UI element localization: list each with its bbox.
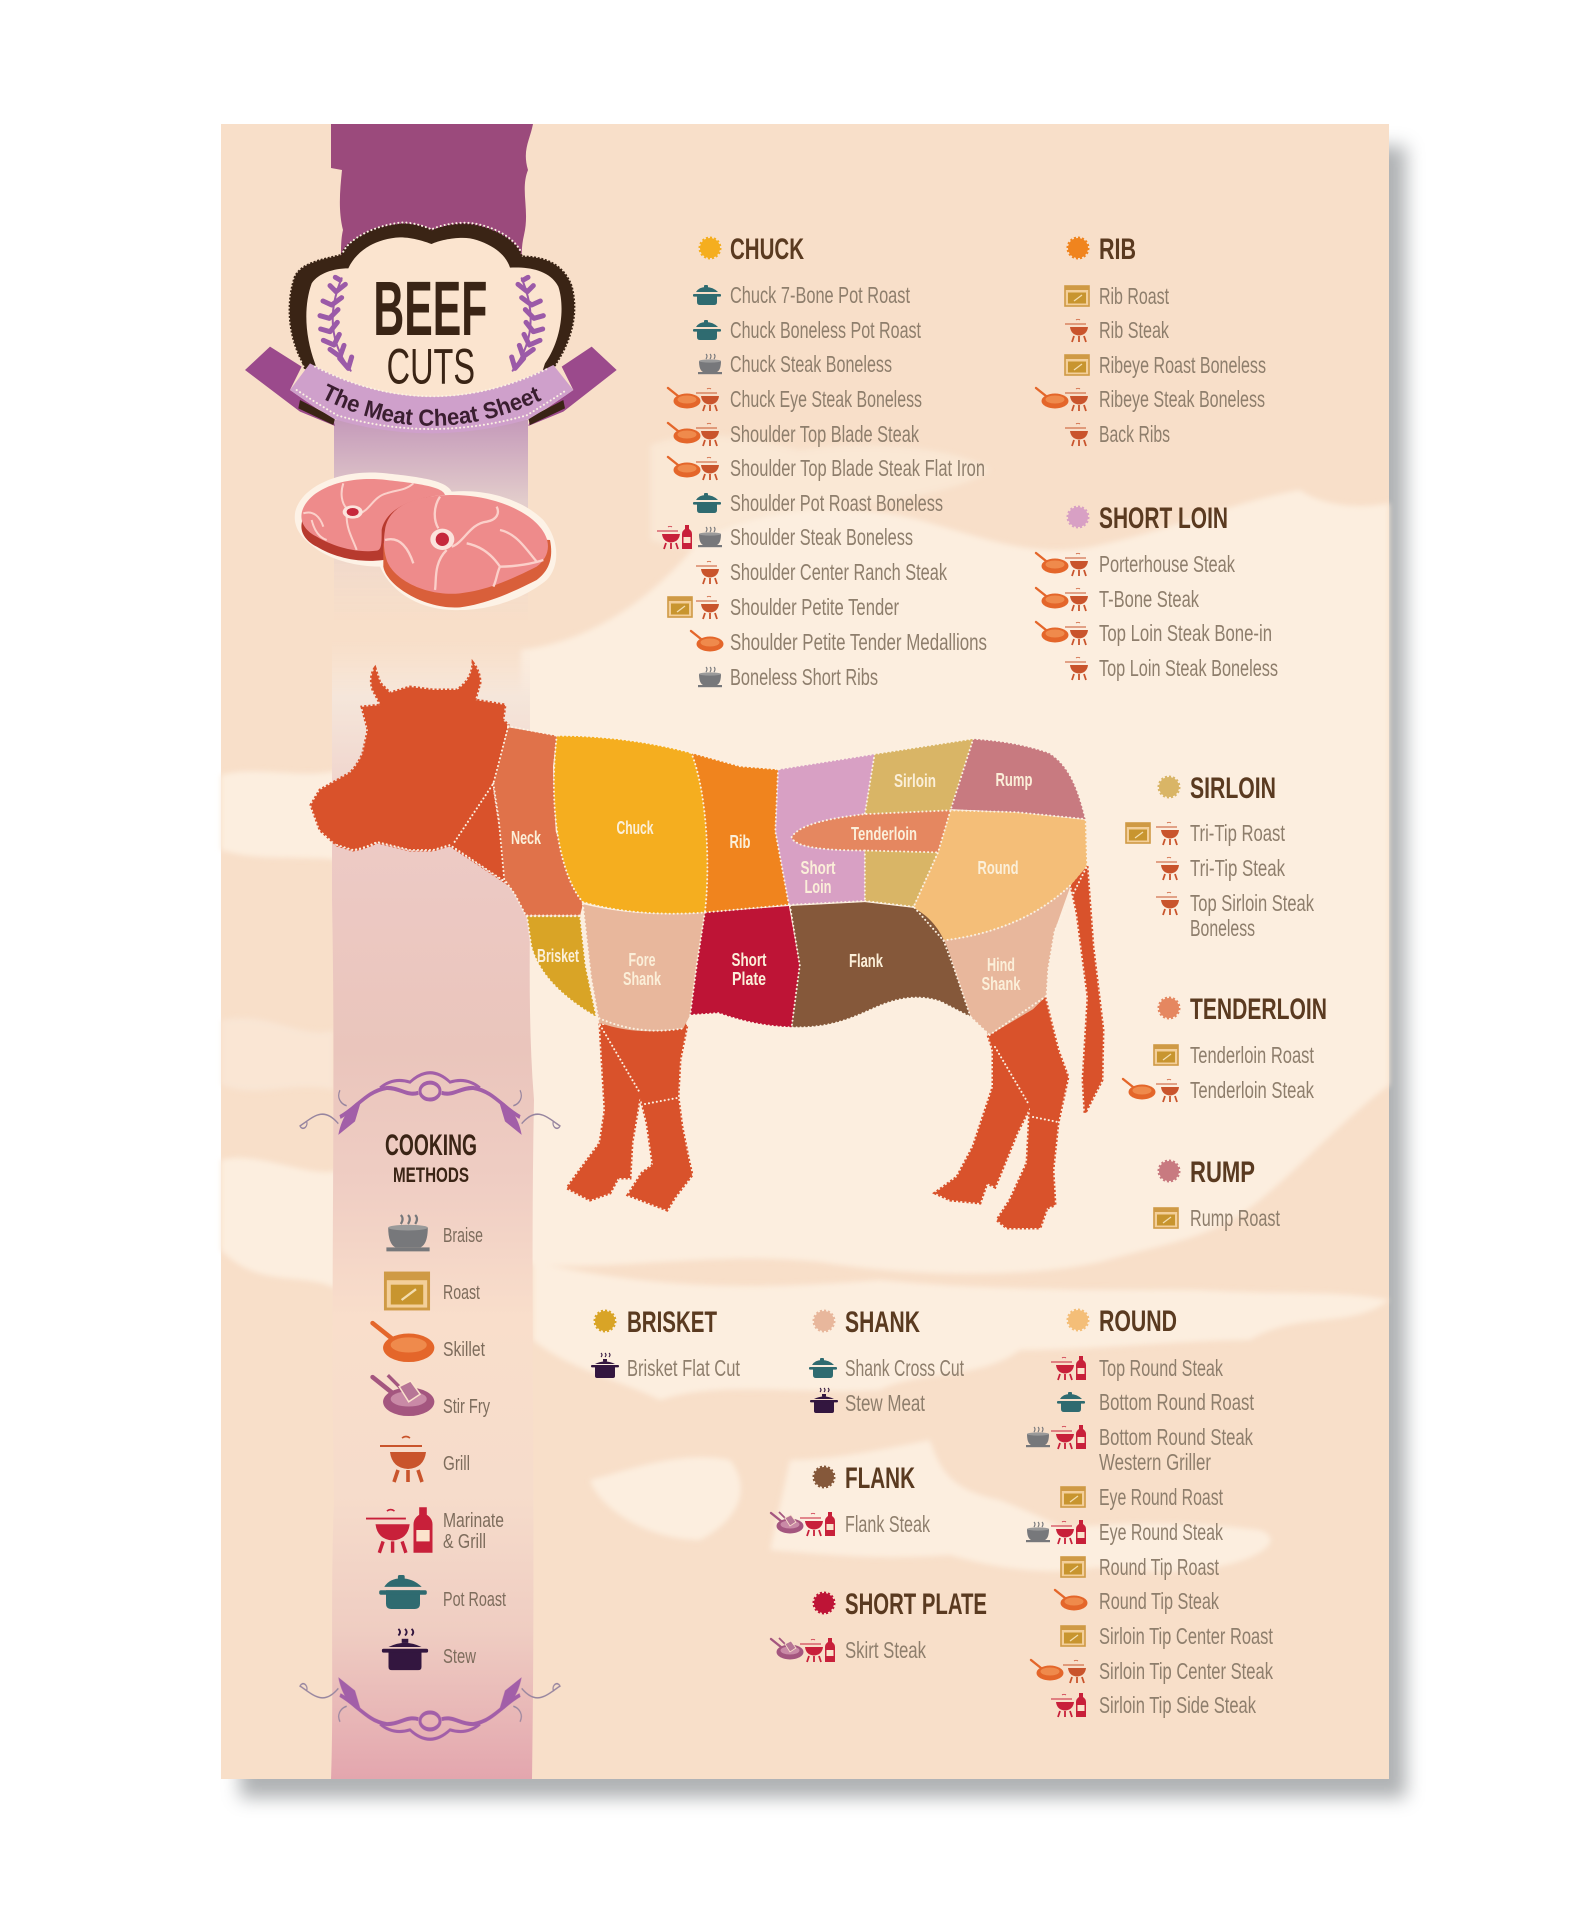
row: Shoulder Steak Boneless [657, 524, 913, 550]
row: Shoulder Petite Tender [668, 594, 899, 620]
row: Round Tip Steak [1055, 1588, 1219, 1614]
short loin [775, 754, 875, 905]
rump [951, 739, 1086, 819]
heading: flank: FLANK [845, 1462, 915, 1495]
cut labels: Plate [732, 969, 766, 989]
row: Flank Steak [771, 1511, 930, 1537]
panel: flank cuts [771, 1462, 930, 1537]
top purple ribbon strip [331, 124, 533, 310]
cut labels: Shank [982, 974, 1021, 994]
row: Top Loin Steak Boneless: Top Loin Steak Boneless [1099, 655, 1278, 681]
row: Shoulder Center Ranch Steak: Shoulder Center Ranch Steak [730, 559, 947, 585]
legend: roast [385, 1273, 480, 1309]
row: Top Loin Steak Bone-in [1036, 620, 1272, 646]
title: CUTS: CUTS [387, 338, 475, 394]
row: Rib Steak: Rib Steak [1099, 317, 1169, 343]
row: Bottom Round Roast [1057, 1389, 1254, 1415]
row: Shank Cross Cut: Shank Cross Cut [845, 1355, 964, 1381]
panel: brisket cuts [591, 1306, 740, 1381]
cut labels: Shank [623, 969, 662, 989]
legend: grill [380, 1436, 470, 1482]
row: Tenderloin Roast: Tenderloin Roast [1190, 1042, 1314, 1068]
cut labels: Sirloin [894, 771, 936, 791]
cut labels: Chuck [616, 818, 654, 838]
title badge [245, 222, 616, 434]
row: Top Sirloin Steak Boneless: Boneless [1190, 915, 1255, 941]
badge frame [290, 224, 574, 393]
row: Chuck Steak Boneless: Chuck Steak Boneless [730, 351, 892, 377]
tenderloin [792, 810, 951, 852]
row: Shoulder Top Blade Steak Flat Iron [668, 455, 985, 481]
row: Stew Meat: Stew Meat [845, 1390, 925, 1416]
row: Chuck 7-Bone Pot Roast [693, 282, 910, 308]
row: Shoulder Petite Tender: Shoulder Petite Tender [730, 594, 899, 620]
badge interior [306, 237, 562, 400]
heading: sirloin: SIRLOIN [1190, 772, 1276, 805]
row: Flank Steak: Flank Steak [845, 1511, 930, 1537]
row: Bottom Round Steak Western Griller: Bottom Round Steak [1099, 1424, 1253, 1450]
heading: sirloin [1159, 772, 1276, 805]
row: Shoulder Pot Roast Boneless [693, 490, 943, 516]
ribbon tails [245, 347, 617, 426]
legend: braise: Braise [443, 1225, 483, 1247]
heading: short plate: SHORT PLATE [845, 1588, 987, 1621]
fore shank [583, 904, 705, 1031]
legend: skillet: Skillet [443, 1339, 485, 1361]
panel: rib cuts [1036, 233, 1266, 447]
row: T-Bone Steak [1036, 586, 1199, 612]
row: Top Sirloin Steak Boneless: Top Sirloin Steak [1190, 890, 1314, 916]
heading: rib: RIB [1099, 233, 1136, 266]
row: Sirloin Tip Center Steak [1031, 1658, 1273, 1684]
legend: pot roast [379, 1575, 506, 1611]
row: Skirt Steak: Skirt Steak [845, 1637, 926, 1663]
row: Chuck 7-Bone Pot Roast: Chuck 7-Bone Pot Roast [730, 282, 910, 308]
rib [691, 753, 789, 912]
legend: marinate and grill [366, 1507, 504, 1553]
heading: rib [1068, 233, 1136, 266]
legend title [385, 1129, 477, 1187]
cut labels: Fore [628, 950, 656, 970]
laurel left [320, 277, 352, 371]
heading: round [1068, 1305, 1177, 1338]
legend: stew: Stew [443, 1646, 476, 1668]
cut labels: Rib [730, 832, 750, 852]
row: Bottom Round Steak Western Griller: Western Griller [1099, 1449, 1211, 1475]
row: Shoulder Petite Tender Medallions: Shoulder Petite Tender Medallions [730, 629, 987, 655]
legend title: COOKING [385, 1129, 477, 1162]
row: Shoulder Top Blade Steak [668, 421, 919, 447]
row: Sirloin Tip Side Steak: Sirloin Tip Side Steak [1099, 1692, 1256, 1718]
ornament bottom [300, 1677, 560, 1739]
front steak [383, 495, 551, 608]
row: Eye Round Roast: Eye Round Roast [1099, 1484, 1223, 1510]
row: Tri-Tip Steak [1156, 855, 1285, 881]
row: Tri-Tip Roast [1126, 820, 1285, 846]
row: Bottom Round Roast: Bottom Round Roast [1099, 1389, 1254, 1415]
lower pink strip [331, 640, 534, 1779]
legend: marinate and grill: & Grill [443, 1531, 486, 1553]
legend: skillet [373, 1323, 485, 1362]
panel: sirloin cuts [1126, 772, 1314, 941]
row: Top Loin Steak Boneless [1065, 655, 1278, 681]
row: Top Round Steak: Top Round Steak [1099, 1355, 1223, 1381]
legend: stir fry [373, 1375, 490, 1418]
legend: marinate and grill: Marinate [443, 1510, 504, 1532]
row: Back Ribs [1065, 421, 1170, 447]
panel: cooking methods legend [300, 1073, 560, 1739]
panel: shank cuts [809, 1306, 964, 1416]
row: Top Round Steak [1051, 1355, 1223, 1381]
heading: rump: RUMP [1190, 1156, 1255, 1189]
background watercolor wash [221, 435, 1389, 1572]
row: Shoulder Petite Tender Medallions [691, 629, 987, 655]
heading: shank [814, 1306, 920, 1339]
heading: short loin [1068, 502, 1228, 535]
row: Eye Round Steak [1026, 1519, 1223, 1545]
heading: round: ROUND [1099, 1305, 1177, 1338]
heading: short plate [814, 1588, 987, 1621]
panel: short plate cuts [771, 1588, 987, 1663]
row: Chuck Steak Boneless [698, 351, 892, 377]
row: Chuck Eye Steak Boneless [668, 386, 922, 412]
row: Shoulder Top Blade Steak Flat Iron: Shoulder Top Blade Steak Flat Iron [730, 455, 985, 481]
row: Rib Roast [1065, 283, 1169, 309]
row: Rump Roast: Rump Roast [1190, 1205, 1280, 1231]
chuck [554, 736, 707, 914]
row: Tenderloin Roast [1154, 1042, 1314, 1068]
row: Back Ribs: Back Ribs [1099, 421, 1170, 447]
cut labels: Neck [511, 828, 542, 848]
legend: pot roast: Pot Roast [443, 1589, 506, 1611]
cow head [311, 663, 508, 883]
panel: rump cuts [1154, 1156, 1280, 1231]
dotted leg and head joints [337, 842, 1058, 1122]
row: Porterhouse Steak [1036, 551, 1235, 577]
row: Rib Steak [1065, 317, 1169, 343]
cow diagram [311, 663, 1103, 1228]
cut labels: Short [732, 950, 767, 970]
row: Ribeye Roast Boneless [1065, 352, 1266, 378]
cut labels: Flank [849, 951, 884, 971]
row: Ribeye Steak Boneless [1036, 386, 1265, 412]
heading: shank: SHANK [845, 1306, 920, 1339]
row: Eye Round Steak: Eye Round Steak [1099, 1519, 1223, 1545]
row: Eye Round Roast [1061, 1484, 1223, 1510]
row: Sirloin Tip Center Steak: Sirloin Tip Center Steak [1099, 1658, 1273, 1684]
row: Boneless Short Ribs [698, 664, 878, 690]
heading: tenderloin [1159, 993, 1327, 1026]
row: Sirloin Tip Side Steak [1051, 1692, 1256, 1718]
row: Chuck Boneless Pot Roast: Chuck Boneless Pot Roast [730, 317, 921, 343]
legend: stew [382, 1629, 476, 1670]
heading: brisket [595, 1306, 717, 1339]
row: T-Bone Steak: T-Bone Steak [1099, 586, 1199, 612]
steak halo [295, 473, 556, 610]
cut labels: Short [800, 858, 836, 878]
row: Shoulder Pot Roast Boneless: Shoulder Pot Roast Boneless [730, 490, 943, 516]
heading: flank [814, 1462, 915, 1495]
legend: stir fry: Stir Fry [443, 1396, 490, 1418]
hind legs [935, 998, 1068, 1228]
legend title: METHODS [393, 1164, 469, 1187]
row: Brisket Flat Cut [591, 1353, 740, 1381]
row: Tri-Tip Steak: Tri-Tip Steak [1190, 855, 1285, 881]
row: Top Sirloin Steak Boneless [1156, 890, 1314, 941]
row: Rib Roast: Rib Roast [1099, 283, 1169, 309]
row: Sirloin Tip Center Roast [1061, 1623, 1273, 1649]
laurel right [512, 277, 543, 371]
tail [1071, 866, 1103, 1113]
row: Round Tip Roast: Round Tip Roast [1099, 1554, 1219, 1580]
heading: tenderloin: TENDERLOIN [1190, 993, 1327, 1026]
cut labels: Rump [996, 770, 1032, 790]
panel: short loin cuts [1036, 502, 1278, 681]
panel: round cuts [1026, 1305, 1273, 1718]
panel: chuck cuts [657, 233, 987, 690]
row: Chuck Boneless Pot Roast [693, 317, 921, 343]
steaks illustration [295, 473, 556, 610]
front legs [567, 1025, 692, 1210]
row: Shoulder Top Blade Steak: Shoulder Top Blade Steak [730, 421, 919, 447]
legend: roast: Roast [443, 1282, 480, 1304]
fading strip under badge [334, 420, 528, 620]
heading: chuck: CHUCK [730, 233, 804, 266]
row: Tenderloin Steak: Tenderloin Steak [1190, 1077, 1314, 1103]
row: Round Tip Roast [1061, 1554, 1219, 1580]
back steak [301, 479, 445, 561]
row: Top Loin Steak Bone-in: Top Loin Steak Bone-in [1099, 620, 1272, 646]
legend: braise [386, 1215, 483, 1251]
cut labels: Loin [804, 877, 832, 897]
row: Porterhouse Steak: Porterhouse Steak [1099, 551, 1235, 577]
page shadow [240, 146, 1406, 1798]
panel: tenderloin cuts [1123, 993, 1327, 1103]
row: Tenderloin Steak [1123, 1077, 1314, 1103]
row: Ribeye Roast Boneless: Ribeye Roast Boneless [1099, 352, 1266, 378]
neck [493, 727, 583, 916]
row: Shank Cross Cut [809, 1355, 964, 1381]
row: Brisket Flat Cut: Brisket Flat Cut [627, 1355, 740, 1381]
dotted cut lines [453, 727, 1086, 1027]
cut labels: Tenderloin [851, 824, 917, 844]
row: Round Tip Steak: Round Tip Steak [1099, 1588, 1219, 1614]
cut labels: Hind [987, 955, 1015, 975]
flank [790, 902, 971, 1027]
title: BEEF: BEEF [373, 266, 487, 352]
legend: grill: Grill [443, 1453, 470, 1475]
ribbon band [290, 363, 573, 433]
row: Shoulder Steak Boneless: Shoulder Steak Boneless [730, 524, 913, 550]
row: Bottom Round Steak Western Griller [1026, 1424, 1253, 1475]
round [914, 810, 1087, 940]
subtitle: The Meat Cheat Sheet [325, 383, 542, 426]
poster background [221, 124, 1389, 1779]
row: Tri-Tip Roast: Tri-Tip Roast [1190, 820, 1285, 846]
hind shank [943, 885, 1071, 1035]
heading: brisket: BRISKET [627, 1306, 717, 1339]
cow regions [453, 726, 1087, 1035]
brisket [527, 916, 596, 1017]
heading: chuck [700, 233, 804, 266]
ornament top [300, 1073, 560, 1135]
heading: short loin: SHORT LOIN [1099, 502, 1228, 535]
cut labels [511, 770, 1032, 994]
row: Skirt Steak [771, 1637, 926, 1663]
row: Chuck Eye Steak Boneless: Chuck Eye Steak Boneless [730, 386, 922, 412]
row: Sirloin Tip Center Roast: Sirloin Tip Center Roast [1099, 1623, 1273, 1649]
sirloin [865, 739, 973, 907]
row: Ribeye Steak Boneless: Ribeye Steak Boneless [1099, 386, 1265, 412]
row: Boneless Short Ribs: Boneless Short Ribs [730, 664, 878, 690]
short plate [690, 906, 800, 1027]
cut labels: Brisket [537, 946, 579, 966]
row: Stew Meat [810, 1388, 925, 1416]
cut labels: Round [978, 858, 1018, 878]
row: Shoulder Center Ranch Steak [696, 559, 947, 585]
